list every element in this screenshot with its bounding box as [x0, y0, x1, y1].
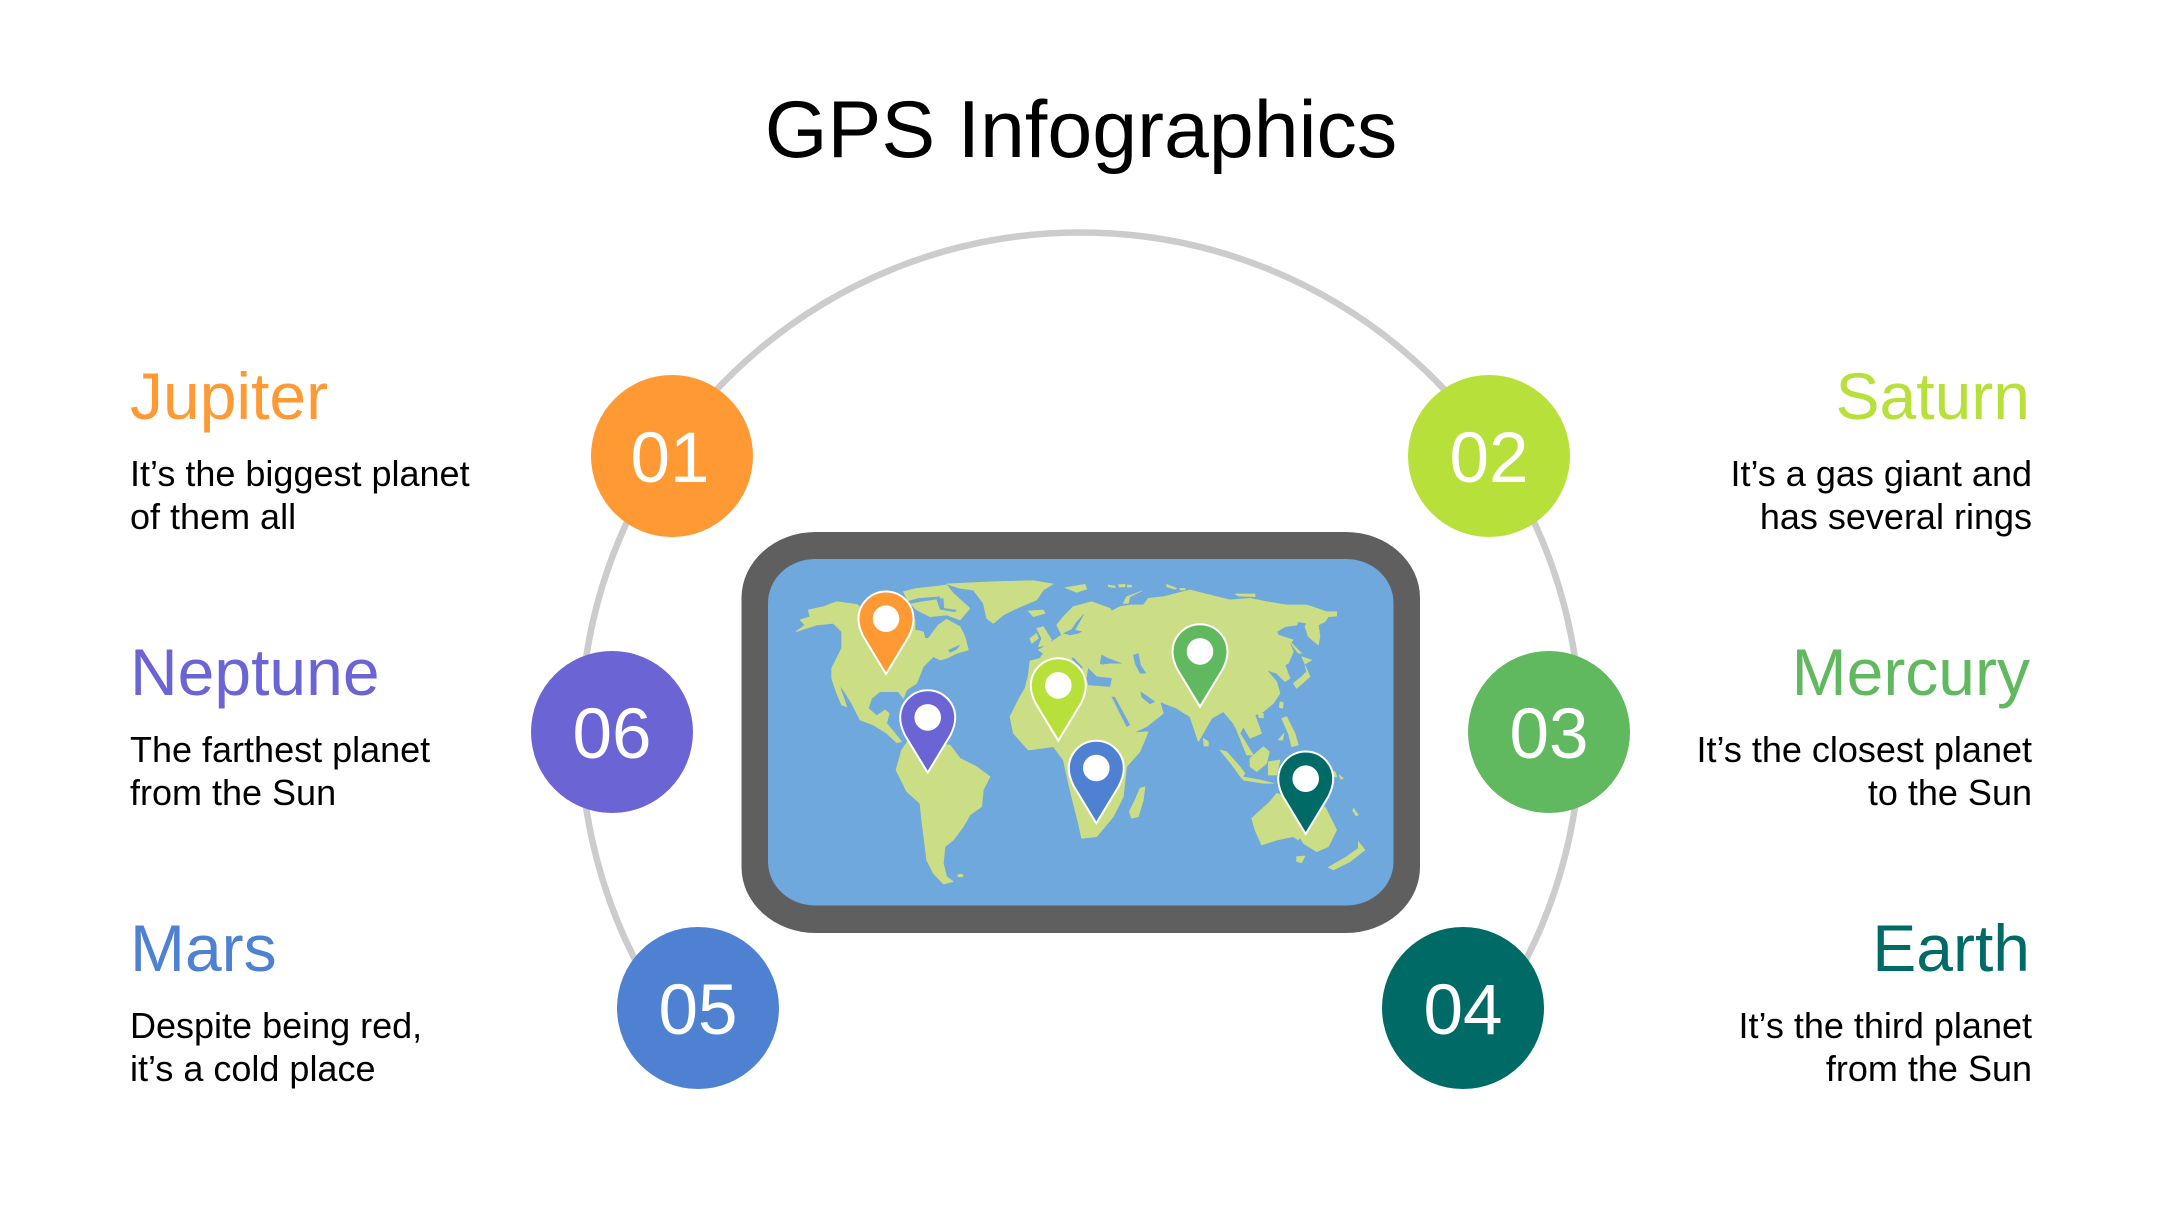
java	[1242, 777, 1273, 783]
number badge 03	[1468, 651, 1630, 813]
gulf of st lawrence	[948, 645, 960, 653]
taiwan	[1279, 702, 1283, 708]
text block: Mercury: to the Sun	[1868, 772, 2032, 813]
text block: Mercury: It’s the closest planet	[1696, 729, 2032, 770]
sumatra	[1220, 750, 1245, 778]
pacific islands	[1339, 775, 1343, 779]
pin: orange	[858, 592, 914, 674]
adriatic sea	[1072, 658, 1083, 669]
honshu	[1293, 665, 1310, 688]
gulf of bothnia	[1063, 614, 1084, 635]
number badge 01	[591, 375, 753, 537]
text block: Saturn	[1730, 359, 2032, 537]
text block: Saturn: Saturn	[1836, 359, 2030, 433]
new guinea	[1320, 767, 1337, 778]
number badge 04	[1382, 927, 1544, 1089]
hokkaido	[1302, 657, 1312, 664]
pin: blue	[1069, 741, 1124, 823]
title: GPS Infographics	[765, 85, 1397, 175]
red sea	[1112, 697, 1130, 727]
great britain	[1037, 627, 1052, 647]
svalbard	[1065, 584, 1087, 592]
pin: teal	[1278, 752, 1333, 834]
text block: Saturn: has several rings	[1760, 496, 2032, 537]
sulawesi	[1268, 760, 1280, 775]
text block: Jupiter: of them all	[130, 496, 296, 537]
text block: Earth: from the Sun	[1826, 1048, 2032, 1089]
black sea	[1100, 655, 1122, 664]
text block: Mars	[130, 911, 422, 1089]
text block: Earth	[1738, 911, 2032, 1089]
number badge 03: 03	[1510, 695, 1588, 774]
australia	[1252, 793, 1337, 852]
map ocean	[768, 559, 1394, 906]
text block: Mars: Mars	[130, 911, 277, 985]
sakhalin	[1290, 642, 1302, 653]
new zealand	[1328, 842, 1365, 870]
south america	[896, 740, 990, 884]
caspian sea	[1133, 653, 1146, 673]
number badge 06	[531, 651, 693, 813]
madagascar	[1129, 787, 1145, 818]
borneo	[1250, 747, 1269, 772]
device with world map	[742, 532, 1420, 933]
orbit arc	[581, 232, 1580, 1025]
text block: Earth: It’s the third planet	[1738, 1005, 2032, 1046]
number badge 06: 06	[573, 695, 651, 774]
text block: Mars: Despite being red,	[130, 1005, 422, 1046]
pin: lime	[1031, 658, 1086, 741]
number badge 02: 02	[1450, 419, 1528, 498]
australian notch	[1297, 838, 1303, 844]
number badge 02	[1408, 375, 1570, 537]
text block: Mars: it’s a cold place	[130, 1048, 375, 1089]
text block: Neptune	[130, 635, 430, 813]
novaya zemlya	[1123, 591, 1142, 603]
arctic islands	[903, 585, 970, 620]
eurasia and africa	[1010, 590, 1337, 838]
device frame	[742, 532, 1420, 933]
inland seas	[907, 597, 1303, 844]
text block: Mercury: Mercury	[1792, 635, 2030, 709]
number badge 04: 04	[1424, 971, 1502, 1050]
persian gulf	[1141, 692, 1155, 704]
text block: Neptune: Neptune	[130, 635, 380, 709]
greenland	[947, 581, 1053, 623]
north america	[796, 602, 968, 743]
arctic channels	[907, 597, 940, 604]
pin: green	[1172, 624, 1228, 707]
text block: Neptune: from the Sun	[130, 772, 336, 813]
text block: Neptune: The farthest planet	[130, 729, 430, 770]
ireland	[1030, 633, 1038, 643]
number badge 05	[617, 927, 779, 1089]
text block: Jupiter: Jupiter	[130, 359, 328, 433]
sri lanka	[1203, 738, 1208, 746]
falkland islands	[958, 874, 963, 877]
world map land	[796, 581, 1365, 884]
northern islands	[1108, 585, 1115, 588]
east mediterranean sea	[1087, 668, 1112, 687]
number badge 05: 05	[659, 971, 737, 1050]
number badge 01: 01	[631, 419, 709, 498]
text block: Jupiter	[130, 359, 470, 537]
iceland	[1028, 610, 1045, 617]
text block: Earth: Earth	[1872, 911, 2030, 985]
tasmania	[1297, 856, 1305, 863]
text block: Jupiter: It’s the biggest planet	[130, 453, 470, 494]
text block: Mercury	[1696, 635, 2032, 813]
philippines	[1282, 717, 1298, 747]
pin: purple	[900, 690, 955, 773]
hainan	[1258, 713, 1263, 718]
text block: Saturn: It’s a gas giant and	[1730, 453, 2032, 494]
